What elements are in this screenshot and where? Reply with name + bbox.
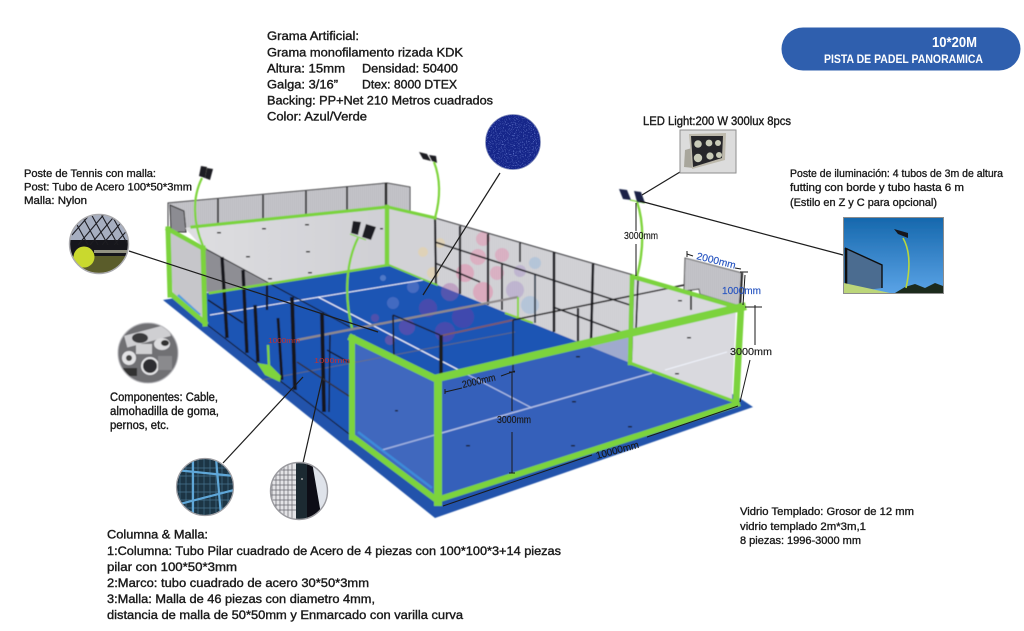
text: components: almohadilla de goma, — [110, 404, 219, 418]
text: tennis post: Malla: Nylon — [24, 195, 87, 207]
left side grey glass — [203, 248, 268, 292]
dimensions: 3000mm — [730, 347, 772, 358]
text: artificial grass spec: Altura: 15mm — [267, 62, 345, 76]
text: tempered glass: Vidrio Templado: Grosor de 12 mm — [740, 506, 914, 518]
photo: LED floodlight — [680, 130, 736, 173]
text: tennis post: Poste de Tennis con malla: — [24, 168, 156, 180]
text: column and mesh: pilar con 100*50*3mm — [107, 560, 237, 574]
title pill — [782, 28, 1020, 70]
right side glass wall — [435, 218, 633, 363]
text: artificial grass spec — [267, 29, 493, 124]
text: artificial grass spec: Densidad: 50400 — [362, 62, 458, 76]
text: components — [110, 390, 219, 432]
front long glass tint — [438, 334, 736, 500]
text: lighting pole: futting con borde y tubo hasta 6 m — [790, 182, 964, 194]
dimensions: 3000mm — [624, 231, 658, 242]
text: tennis post: Post: Tubo de Acero 100*50*3mm — [24, 182, 192, 194]
text: lighting pole: (Estilo en Z y C para opcional) — [790, 197, 937, 209]
rear right hatched panel — [684, 258, 742, 306]
text: tempered glass: 8 piezas: 1996-3000 mm — [740, 535, 861, 547]
text: LED light: LED Light:200 W 300lux 8pcs — [643, 114, 791, 128]
photo: components hardware — [118, 323, 178, 383]
dimensions — [443, 203, 772, 506]
text: column and mesh: 3:Malla: Malla de 46 piezas con diametro 4mm, — [107, 592, 375, 606]
front end glass tint — [352, 338, 438, 500]
pink watermark circles — [371, 232, 541, 345]
text: column and mesh: 2:Marco: tubo cuadrado de acero 30*50*3mm — [107, 576, 369, 590]
light pole: back centre — [419, 152, 439, 218]
photo: blue welded mesh — [175, 458, 235, 518]
green door frame — [257, 345, 281, 382]
text: column and mesh: 1:Columna: Tubo Pilar cuadrado de Acero de 4 piezas con 100*100*3+14 piezas — [107, 544, 561, 558]
dimensions: 3000mm — [497, 415, 531, 426]
left rear glass — [168, 229, 204, 324]
title pill: PISTA DE PADEL PANORAMICA — [824, 52, 983, 66]
photo: light pole on site — [844, 218, 944, 294]
glass clips — [217, 224, 691, 446]
court illustration — [163, 152, 753, 518]
green steel frames — [168, 207, 742, 502]
text: tempered glass: vidrio templado 2m*3m,1 — [740, 521, 866, 533]
low front fence — [393, 273, 743, 378]
dimensions: 10000mm — [595, 440, 640, 462]
red dimension labels — [268, 338, 350, 365]
end panel on right — [630, 278, 736, 401]
right side upper glass — [387, 207, 437, 285]
text: artificial grass spec: Galga: 3/16” — [267, 78, 338, 92]
text: artificial grass spec: Grama Artificial: — [267, 29, 359, 43]
light pole: right — [619, 189, 645, 276]
red dimension labels: 1000mm — [314, 358, 350, 365]
text: lighting pole: Poste de iluminación: 4 tubos de 3m de altura — [790, 168, 1004, 180]
text: components: Componentes: Cable, — [110, 390, 218, 404]
text: column and mesh: Columna & Malla: — [107, 528, 208, 542]
text: column and mesh: distancia de malla de 50*50mm y Enmarcado con varilla curva — [107, 608, 463, 622]
dimensions: 1000mm — [722, 286, 761, 297]
court lines — [210, 280, 727, 450]
text: artificial grass spec: Dtex: 8000 DTEX — [362, 78, 457, 92]
red dimension labels: 1000mm — [268, 338, 300, 345]
light pole: back left — [195, 166, 213, 246]
text: column and mesh — [107, 528, 561, 622]
floor tint — [205, 265, 736, 500]
left fence — [204, 248, 353, 437]
blue floor base — [163, 264, 753, 518]
text: artificial grass spec: Grama monofilamento rizada KDK — [267, 46, 464, 60]
text: artificial grass spec: Backing: PP+Net 210 Metros cuadrados — [267, 94, 493, 108]
photo: tennis net and ball — [68, 212, 132, 276]
text: artificial grass spec: Color: Azul/Verde — [267, 110, 367, 124]
text: components: pernos, etc. — [110, 418, 169, 432]
rear upper glass wall — [168, 183, 410, 232]
dimensions: 2000mm — [695, 251, 737, 272]
leader lines — [129, 172, 843, 463]
title pill: 10*20M — [932, 34, 977, 51]
right fence posts — [435, 218, 638, 360]
light pole: front centre — [347, 221, 376, 328]
text: lighting pole — [790, 168, 1004, 209]
rear glass wall — [185, 207, 388, 293]
photo: post with mesh — [270, 462, 331, 520]
photo: artificial grass texture — [486, 114, 540, 170]
text: tempered glass — [740, 506, 914, 547]
dimensions: 2000mm — [461, 373, 497, 391]
tennis net — [262, 297, 533, 380]
inner cyan strips — [178, 295, 432, 488]
text: tennis post — [24, 168, 192, 207]
